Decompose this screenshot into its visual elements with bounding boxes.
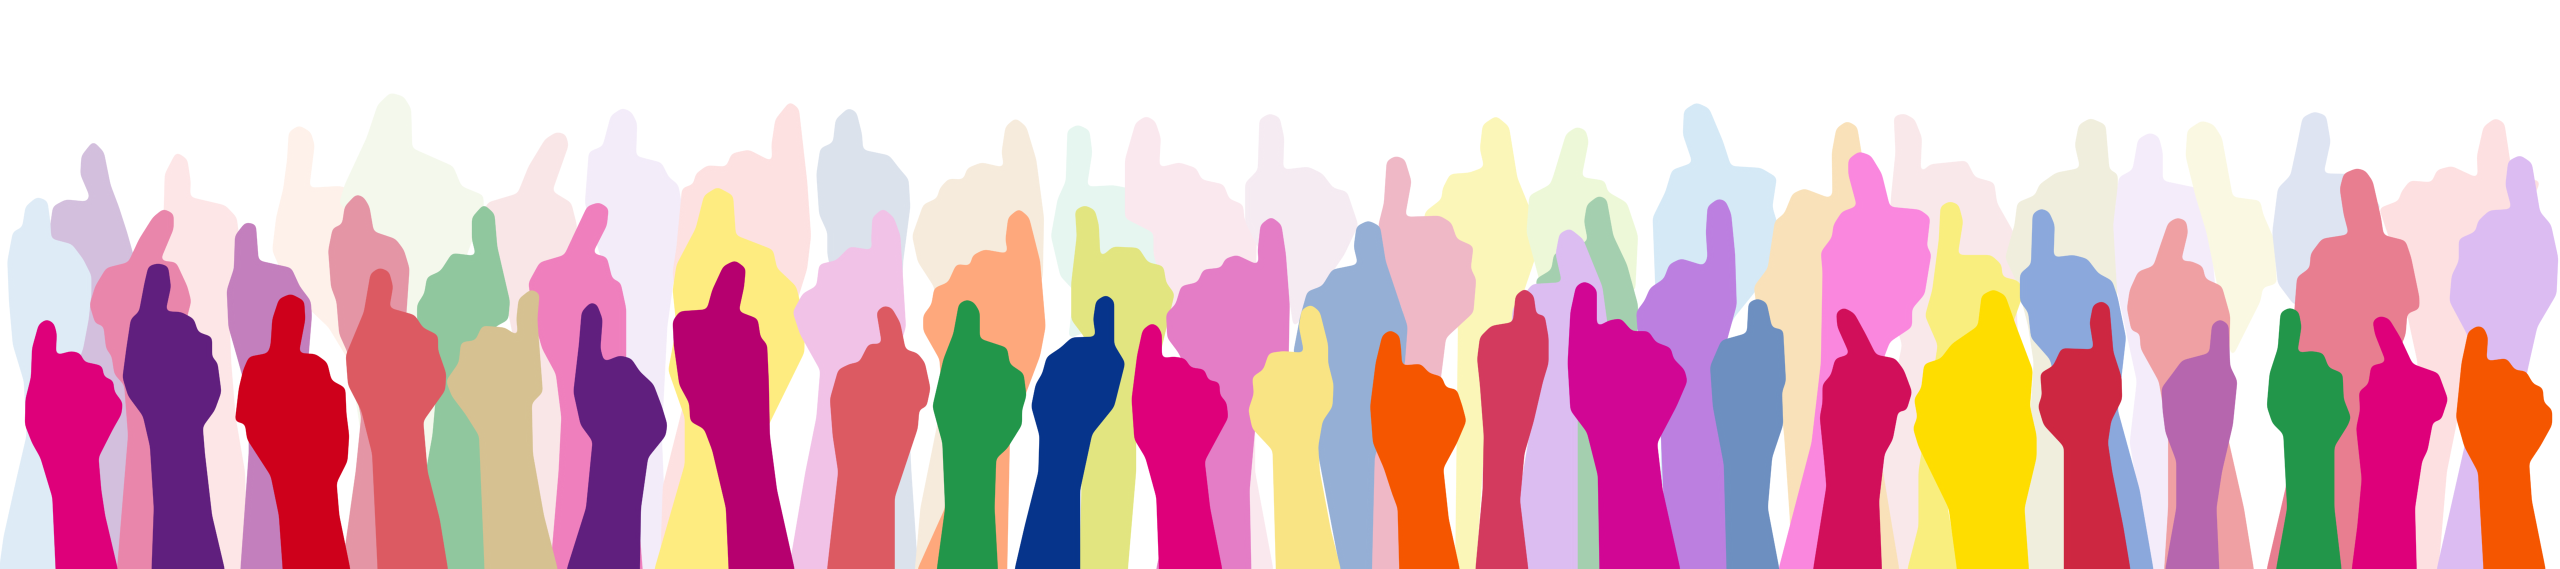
- hand: green: [418, 205, 509, 569]
- hand: salmon: [2268, 169, 2419, 569]
- hand: crimson: [1476, 290, 1548, 569]
- hand: sage: [1537, 197, 1637, 569]
- hand: crimson magenta: [674, 261, 794, 569]
- hand: pale pink: [1126, 117, 1272, 569]
- hand: magenta: [1132, 324, 1227, 569]
- hand: orchid pink: [1157, 218, 1289, 569]
- hand: bold purple: [1637, 200, 1736, 569]
- mid hands left section: [91, 188, 905, 569]
- hand: pale pink: [1881, 114, 2018, 569]
- hand: green: [2268, 308, 2350, 569]
- back hands right section: [1755, 112, 2539, 569]
- hand: magenta: [2353, 317, 2447, 569]
- hand: pale pink: [661, 103, 810, 569]
- hand: steel blue dark: [1711, 299, 1785, 569]
- hand: lilac: [1511, 229, 1607, 569]
- hand: dark purple: [123, 264, 224, 569]
- mid hands centre section: [919, 157, 1736, 569]
- hand: yellow: [1914, 290, 2036, 569]
- hand: red: [236, 295, 349, 569]
- hand: pale lime: [1527, 128, 1637, 290]
- hand: khaki lime: [1072, 206, 1174, 569]
- hand: pink: [91, 210, 190, 569]
- hand: pale olive: [2006, 119, 2117, 569]
- hand: pale green: [340, 94, 483, 569]
- hand: pale periwinkle: [2273, 112, 2380, 305]
- hand: blue grey: [817, 109, 917, 569]
- hand: magenta: [26, 320, 122, 569]
- hand: pale orchid: [790, 209, 905, 569]
- hand: salmon pink: [2128, 218, 2253, 569]
- layer: mid-tone hands: [91, 152, 2557, 569]
- hand: pink magenta: [529, 203, 642, 569]
- layer: saturated front hands: [26, 261, 2551, 569]
- hand: pale blue: [0, 198, 91, 569]
- hand: tan: [447, 290, 557, 569]
- hand: pale gold: [1249, 306, 1340, 569]
- hand: dark red: [2039, 302, 2129, 569]
- hand: blue: [2021, 209, 2153, 569]
- back hands left section: [0, 94, 917, 569]
- hand: pale lavender: [2114, 134, 2221, 569]
- hand: raspberry: [1814, 308, 1911, 569]
- hand: pale yellow: [1424, 117, 1536, 569]
- hand: light yellow: [1908, 202, 2024, 569]
- front hands left section: [26, 261, 794, 569]
- hand: pale pink: [137, 153, 247, 569]
- hand: orchid: [228, 223, 311, 569]
- hand: navy: [1016, 296, 1124, 569]
- hand: peach orange: [919, 210, 1045, 569]
- hand: green: [933, 300, 1026, 569]
- front hands centre section: [828, 282, 1686, 569]
- hand: coral: [828, 307, 930, 569]
- hand: light lilac: [2438, 156, 2557, 569]
- hand: coral: [347, 269, 447, 569]
- hand: bright pink: [1780, 152, 1930, 569]
- back hands centre section: [913, 103, 1777, 569]
- hand: pale rose: [483, 133, 576, 569]
- hand: dark purple: [568, 303, 666, 569]
- hand: lilac: [49, 142, 133, 569]
- hand: rose: [329, 195, 409, 569]
- hand: pale mauve: [1246, 114, 1357, 327]
- hand: pink mauve: [1371, 157, 1475, 569]
- hand: pale cream: [2187, 122, 2276, 356]
- front hands right section: [1711, 290, 2551, 569]
- hand: beige: [913, 119, 1043, 569]
- hand: apricot: [1755, 122, 1900, 569]
- hand: orange: [2457, 327, 2551, 569]
- mid hands right section: [1780, 152, 2557, 569]
- hand: steel blue: [1294, 221, 1407, 569]
- hand: vivid magenta: [1569, 282, 1686, 569]
- hand: purple mauve: [2162, 320, 2236, 569]
- hand: orange: [1371, 331, 1465, 569]
- hand: pale pink: [2380, 119, 2539, 569]
- hand: yellow: [655, 188, 804, 569]
- hand: pale peach: [273, 126, 384, 363]
- hand: pale mint: [1052, 126, 1157, 337]
- hand: pale sky: [1654, 103, 1777, 490]
- hand: pale lavender: [586, 109, 683, 569]
